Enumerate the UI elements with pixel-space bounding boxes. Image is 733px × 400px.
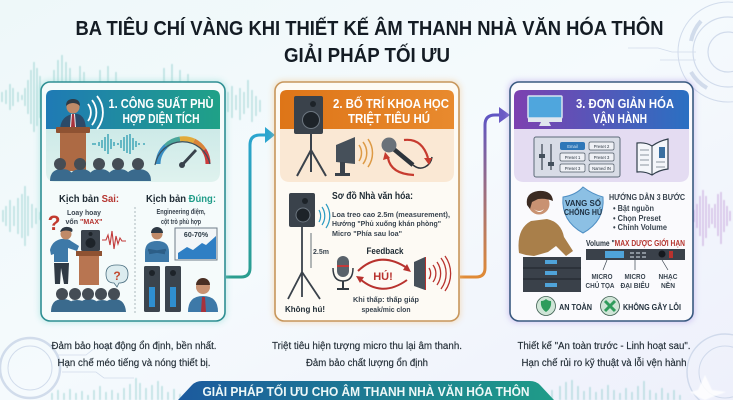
- right caption: cột trò phù hợp: [161, 217, 201, 226]
- feedback caption: [353, 295, 419, 314]
- icon: speaker on podium: [76, 230, 102, 285]
- icon: technician at rack: [518, 191, 581, 292]
- icon: computer: [528, 96, 562, 126]
- channel labels: NỀN: [661, 280, 675, 290]
- feedback loop: HÚ!: [373, 270, 393, 283]
- caption: panel 1: Hạn chế méo tiếng và nóng thiết bị.: [58, 357, 210, 369]
- caption: panel 3: Hạn chế rủi ro kỹ thuật và lỗi vện hành: [522, 356, 686, 369]
- three steps guide: • Bật nguồn: [613, 204, 654, 213]
- wrong caption: [66, 208, 103, 226]
- feedback label: Feedback: [366, 246, 404, 257]
- panel 1 header: 1. CÔNG SUẤT PHÙ: [108, 96, 214, 111]
- icon: speaker at podium: [56, 96, 103, 171]
- channel labels: NHẠC: [658, 274, 678, 281]
- diagram notes: [332, 210, 450, 238]
- caption: panel 1: Đảm bảo hoạt động ổn định, bền nhất.: [52, 340, 216, 352]
- badge: safe: AN TOÀN: [559, 302, 592, 312]
- icon: studio microphone: [333, 256, 353, 289]
- icon: speaker on tripod: [294, 96, 326, 176]
- icon: tower speakers: [144, 266, 181, 312]
- icon: distorted wave: [102, 231, 126, 249]
- divider: [134, 207, 136, 314]
- panel 3 header: 3. ĐƠN GIẢN HÓA: [576, 96, 675, 111]
- volume label: Volume "MAX DƯỢC GIỚI HẠN: [586, 239, 685, 248]
- chart: 60-70 percent: 60-70%: [184, 232, 209, 239]
- badge: no errors: KHÔNG GÂY LỖI: [623, 301, 681, 312]
- preset control panel: Preset 1: [565, 155, 581, 160]
- scenario wrong heading: Kịch bản Sai:: [59, 193, 119, 205]
- icon: question bubble: [106, 265, 128, 287]
- panel 3: operation: [508, 80, 695, 323]
- icon: question bubble: ?: [113, 269, 121, 283]
- preset control panel: Named IN: [592, 166, 611, 171]
- panel 1 header: HỢP DIỆN TÍCH: [122, 111, 200, 126]
- badge: no errors: [600, 296, 681, 316]
- icon: confident man: [145, 227, 169, 262]
- diagram notes: Micro "Phía sau loa": [332, 229, 402, 238]
- channel labels: ĐẠI BIỂU: [620, 281, 650, 290]
- preset control panel: Preset 2: [594, 144, 610, 149]
- feedback loop: [356, 260, 411, 289]
- rack mixer: [586, 249, 685, 270]
- three steps guide: HƯỚNG DẪN 3 BƯỚC: [609, 193, 685, 202]
- channel labels: CHỦ TỌA: [586, 281, 614, 290]
- right caption: Engineering điệm,: [156, 207, 206, 216]
- wrong caption: Loay hoay: [67, 208, 102, 217]
- panel 3 header: [514, 90, 689, 129]
- icon: bad audience: [51, 288, 126, 312]
- diagram notes: Hướng "Phủ xuống khán phòng": [332, 219, 441, 228]
- scenario right heading: Kịch bản Đúng:: [146, 193, 216, 205]
- panel 2 lower-header background: [280, 129, 454, 182]
- icon: waveform: [92, 134, 145, 154]
- panel 2 header: 2. BỐ TRÍ KHOA HỌC: [333, 96, 450, 111]
- panel 1: power: [39, 80, 227, 323]
- title: BA TIÊU CHÍ VÀNG KHI THIẾT KẾ ÂM THANH NHÀ VĂN HÓA THÔN: [76, 16, 664, 40]
- panel 2: placement: [273, 80, 461, 323]
- right caption: [156, 207, 206, 226]
- panel 2 header: [280, 90, 454, 129]
- height label: 2.5m: [313, 249, 329, 256]
- panel 3 lower-header background: [514, 129, 689, 182]
- icon: microphone with arrows: [382, 138, 432, 175]
- preset control panel: [534, 137, 620, 177]
- caption: panel 1: [52, 340, 216, 369]
- channel labels: [586, 274, 678, 290]
- icon: tripod speaker correct: [288, 193, 330, 299]
- three steps guide: • Chỉnh Volume: [613, 223, 668, 232]
- arrow: panel 2 to panel 3: [460, 107, 510, 277]
- icon: monitor with red waves: [414, 256, 451, 291]
- panel 2 header: TRIỆT TIÊU HÚ: [348, 111, 430, 126]
- caption: panel 2: [272, 341, 462, 369]
- icon: audience row: [50, 158, 151, 181]
- icon: manual book: [637, 139, 668, 175]
- icon: power gauge: [155, 139, 210, 168]
- server rack: [523, 257, 581, 292]
- three steps guide: • Chọn Preset: [613, 214, 661, 223]
- decorative sparkle: [690, 375, 726, 400]
- icon: question mark: ?: [48, 212, 60, 235]
- shield badge: [563, 187, 603, 233]
- caption: panel 2: Đảm bảo chất lượng ổn định: [306, 357, 428, 369]
- chart: 60-70 percent: [175, 228, 217, 260]
- caption: panel 2: Triệt tiêu hiện tượng micro thu lại âm thanh.: [272, 341, 462, 352]
- icon: confused man: [50, 227, 79, 284]
- caption: panel 3: Thiết kế "An toàn trước - Linh hoạt sau".: [518, 340, 690, 352]
- preset control panel: Preset 3: [594, 155, 610, 160]
- feedback caption: speak/mic clon: [362, 305, 411, 314]
- wrong caption: vốn "MAX": [66, 217, 103, 226]
- channel labels: MICRO: [592, 274, 613, 281]
- shield badge: VANG SỐ: [565, 198, 601, 208]
- icon: monitor speaker: [335, 137, 373, 176]
- preset control panel: Preset 3: [565, 166, 581, 171]
- feedback caption: Khi thấp: thấp giáp: [353, 295, 419, 304]
- badge: safe: [536, 296, 592, 316]
- caption: panel 3: [518, 340, 690, 369]
- diagram heading: Sơ đồ Nhà văn hóa:: [332, 190, 413, 202]
- footer banner: GIẢI PHÁP TỐI ƯU CHO ÂM THANH NHÀ VĂN HÓA THÔN: [202, 384, 530, 399]
- title: GIẢI PHÁP TỐI ƯU: [284, 43, 450, 67]
- decorative sound waves: [2, 55, 680, 400]
- panel 1 header: [46, 90, 220, 129]
- panel 3 header: VẬN HÀNH: [593, 111, 647, 126]
- arrow: panel 1 to panel 2: [226, 127, 275, 277]
- three steps guide: [609, 193, 685, 232]
- diagram notes: Loa treo cao 2.5m (measurement),: [332, 210, 450, 219]
- title: [76, 16, 664, 67]
- footer banner: [178, 381, 554, 400]
- channel labels: MICRO: [624, 274, 646, 281]
- preset control panel: Email: [567, 144, 578, 149]
- label: no feedback: Không hú!: [285, 304, 325, 314]
- icon: smiling man: [188, 278, 218, 312]
- shield badge: CHỐNG HÚ: [564, 207, 602, 217]
- decorative purple wave: [694, 190, 730, 246]
- panel 1 lower-header background: [46, 129, 220, 182]
